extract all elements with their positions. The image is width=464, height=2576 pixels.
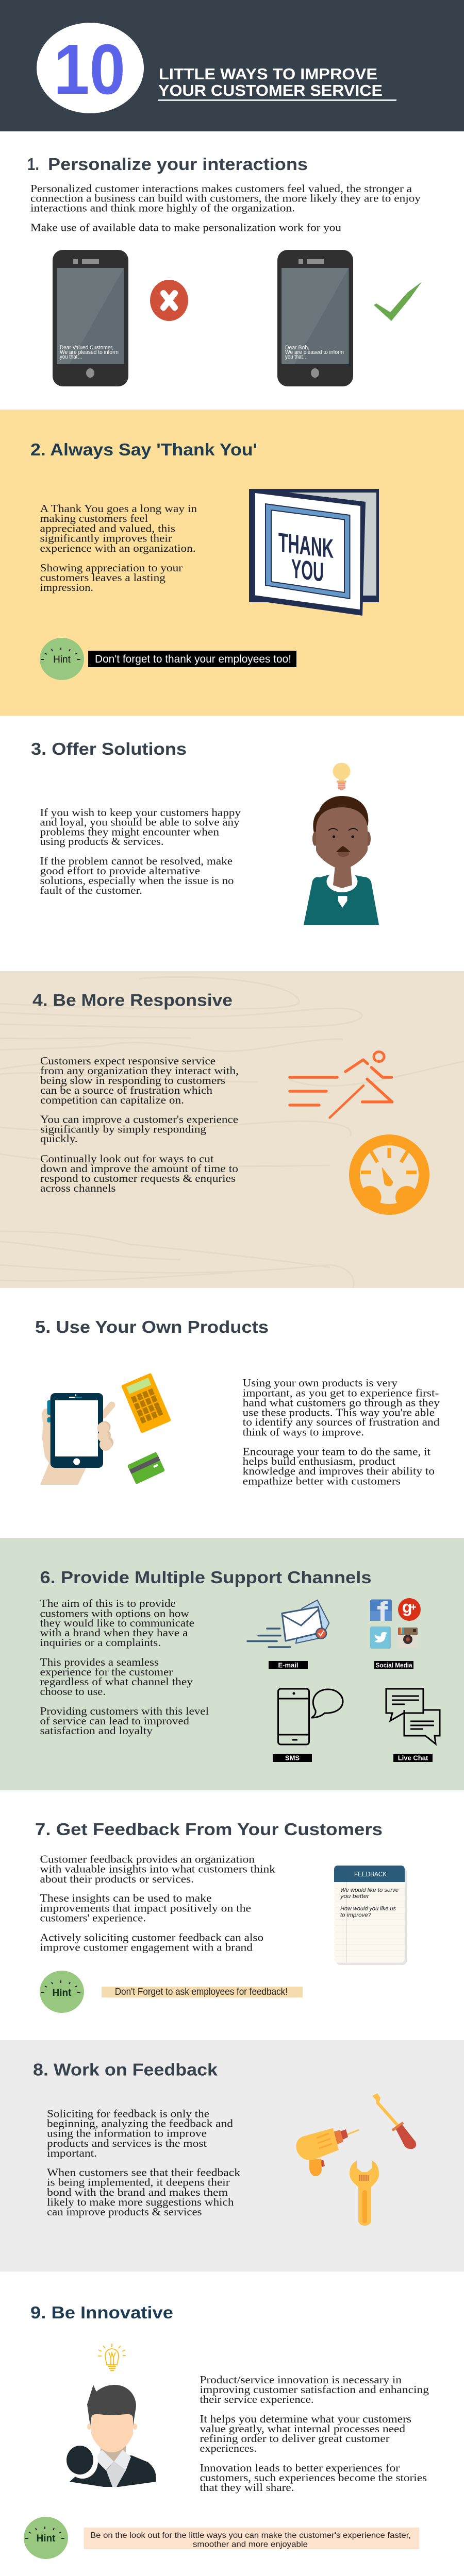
text block 7: customers' experience. — [40, 1912, 146, 1924]
text block 7: about their products or services. — [40, 1873, 194, 1885]
title: YOUR CUSTOMER SERVICE — [158, 81, 383, 99]
text block 1: connection a business can build with customers, the more likely they are to enjoy — [30, 192, 421, 204]
text block 6: they would like to communicate — [40, 1617, 194, 1629]
text block 6: experience for the customer — [40, 1666, 173, 1678]
text block 6: inquiries or a complaints. — [40, 1636, 161, 1649]
text block 8: likely to make more suggestions which — [47, 2196, 234, 2208]
text block 9 — [200, 2374, 429, 2494]
icon: phone with personalised greeting: We are pleased to inform — [285, 349, 344, 355]
label: social media: Social Media — [375, 1661, 412, 1669]
heading 8: 8. Work on Feedback — [33, 2060, 218, 2079]
text block 8: Soliciting for feedback is only the — [47, 2107, 209, 2120]
text block 7: Customer feedback provides an organization — [40, 1853, 255, 1865]
text block 6: with a brand when they have a — [40, 1626, 188, 1639]
text block 2: A Thank You goes a long way in — [40, 502, 197, 515]
icon: sms — [278, 1689, 343, 1744]
text block 2: making customers feel — [40, 512, 148, 524]
text block 8: using the information to improve — [47, 2127, 207, 2140]
icon: thank you card: YOU — [291, 554, 324, 588]
icon: phone with personalised greeting: Dear Bob, — [285, 345, 309, 351]
text block 9: experiences. — [200, 2442, 257, 2454]
text block 9: Product/service innovation is necessary in — [200, 2374, 402, 2386]
icon: light bulb — [333, 762, 351, 790]
heading 5: 5. Use Your Own Products — [35, 1317, 269, 1336]
icon: speedometer — [349, 1134, 429, 1215]
text block 4: can be a source of frustration which — [40, 1084, 213, 1096]
text block 4: down and improve the amount of time to — [40, 1162, 238, 1175]
illustration: businessman — [67, 2385, 156, 2487]
icon: phone with personalised greeting — [277, 250, 353, 386]
text block 5: think of ways to improve. — [243, 1426, 364, 1438]
icon: phone with personalised greeting: you that… — [285, 354, 308, 360]
label: sms: SMS — [285, 1754, 300, 1762]
text block 7: improvements that impact positively on the — [40, 1902, 251, 1914]
text block 1: Make use of available data to make personalization work for you — [30, 222, 342, 234]
icon: live chat — [386, 1689, 440, 1744]
icon: calculator — [121, 1373, 171, 1433]
hint badge — [40, 638, 84, 680]
text block 3: If the problem cannot be resolved, make — [40, 855, 233, 867]
title: LITTLE WAYS TO IMPROVE — [159, 65, 377, 83]
text block 8: beginning, analyzing the feedback and — [47, 2117, 234, 2130]
text block 9: improving customer satisfaction and enhancing — [200, 2383, 429, 2396]
feedback form card — [334, 1866, 407, 1965]
icon: outlined bulb — [98, 2344, 126, 2370]
text block 8: bond with the brand and makes them — [47, 2186, 228, 2198]
icon: phone with generic greeting: We are pleased to inform — [60, 349, 119, 355]
text block 7: These insights can be used to make — [40, 1892, 211, 1904]
panel: 6 provide multiple support channels — [0, 1538, 464, 1790]
text block 3: problems they might encounter when — [40, 825, 220, 838]
text block 8: products and services is the most — [47, 2137, 207, 2149]
text block 5: hand what customers go through as they — [243, 1397, 440, 1409]
text block 8: can improve products & services — [47, 2206, 202, 2218]
heading 1: 1. — [27, 155, 39, 174]
hint badge — [24, 2517, 68, 2559]
text block 7: Actively soliciting customer feedback can also — [40, 1931, 263, 1944]
illustration: customer service man — [304, 796, 379, 925]
text block 9: value greatly, what internal processes need — [200, 2422, 406, 2435]
text block 5: use these products. This way you're able — [243, 1406, 435, 1419]
text block 7: with valuable insights into what customers think — [40, 1862, 276, 1875]
heading 4: 4. Be More Responsive — [32, 990, 233, 1010]
text block 3 — [40, 806, 241, 896]
text block 7: improve customer engagement with a brand — [40, 1941, 253, 1954]
text block 5: knowledge and improves their ability to — [243, 1465, 435, 1477]
text block 6: Providing customers with this level — [40, 1705, 209, 1717]
heading 7: 7. Get Feedback From Your Customers — [35, 1820, 383, 1839]
text block 9: refining order to deliver great customer — [200, 2432, 390, 2445]
text block 4: You can improve a customer's experience — [40, 1113, 238, 1126]
icon: green check mark — [374, 282, 422, 321]
text block 4: quickly. — [40, 1132, 77, 1145]
icon: phone with generic greeting — [53, 250, 128, 386]
panel: 1 personalize your interactions — [27, 155, 422, 386]
hint badge: Hint — [37, 2533, 56, 2544]
text block 4: being slow in responding to customers — [40, 1074, 225, 1087]
icon: social media logos — [370, 1598, 421, 1649]
panel: 5 use your own products — [35, 1317, 440, 1487]
text block 2: experience with an organization. — [40, 542, 196, 554]
text block 3: and loyal, you should be able to solve any — [40, 816, 240, 828]
text block 4: Continually look out for ways to cut — [40, 1153, 214, 1165]
text block 9: It helps you determine what your customers — [200, 2413, 411, 2425]
text block 4: significantly by simply responding — [40, 1123, 207, 1136]
feedback form card: to improve? — [340, 1912, 372, 1919]
heading 6: 6. Provide Multiple Support Channels — [40, 1568, 371, 1587]
text block 4: from any organization they interact with, — [40, 1064, 239, 1077]
hint badge — [40, 1971, 84, 2013]
text block 3: solutions, especially when the issue is no — [40, 874, 234, 887]
hint badge: Hint — [53, 654, 71, 665]
panel: 2 always say thank you — [0, 410, 464, 716]
text block 2: appreciated and valued, this — [40, 522, 175, 535]
feedback form card: FEEDBACK — [354, 1870, 387, 1878]
icon: drill — [296, 2128, 359, 2176]
callout: little ways: Be on the look out for the little ways you can make the customer's experience faster, — [90, 2531, 411, 2540]
text block 2: customers leaves a lasting — [40, 571, 166, 584]
text block 6: choose to use. — [40, 1685, 106, 1698]
text block 6 — [40, 1597, 209, 1737]
hint badge: Hint — [53, 1988, 72, 1998]
text block 3: good effort to provide alternative — [40, 865, 200, 877]
text block 9: their service experience. — [200, 2393, 313, 2405]
text block 2: impression. — [40, 581, 93, 594]
feedback form card: you better — [340, 1893, 370, 1900]
heading 3: 3. Offer Solutions — [31, 739, 187, 758]
label: live chat: Live Chat — [398, 1754, 428, 1762]
text block 4: competition can capitalize on. — [40, 1094, 184, 1106]
text block 4: across channels — [40, 1182, 115, 1194]
text block 2: significantly improves their — [40, 532, 172, 545]
text block 1: Personalized customer interactions makes customers feel valued, the stronger a — [30, 182, 412, 195]
text block 2 — [40, 502, 197, 594]
callout: little ways — [84, 2528, 419, 2549]
icon: google plus — [398, 1598, 421, 1621]
text block 8: is being implemented, it deepens their — [47, 2176, 230, 2189]
label: sms — [273, 1754, 312, 1762]
text block 6: customers with options on how — [40, 1607, 190, 1619]
icon: thank you card: THANK — [278, 528, 334, 564]
icon: google plus: + — [410, 1602, 417, 1613]
text block 5: Encourage your team to do the same, it — [243, 1446, 430, 1458]
text block 5: empathize better with customers — [243, 1475, 401, 1487]
heading 2: 2. Always Say 'Thank You' — [30, 440, 257, 459]
text block 4: respond to customer requests & enquries — [40, 1172, 236, 1184]
text block 4 — [40, 1055, 239, 1194]
text block 6: This provides a seamless — [40, 1656, 159, 1668]
icon: red cross — [150, 280, 188, 321]
text block 3: fault of the customer. — [40, 884, 142, 896]
label: e-mail — [269, 1661, 308, 1669]
header banner — [0, 0, 464, 131]
label: e-mail: E-mail — [278, 1661, 299, 1669]
icon: facebook — [370, 1599, 392, 1621]
callout: thank employees — [88, 651, 296, 667]
icon: wrench — [350, 2161, 379, 2226]
text block 6: satisfaction and loyalty — [40, 1724, 153, 1737]
text block 3: If you wish to keep your customers happy — [40, 806, 241, 819]
heading 9: 9. Be Innovative — [30, 2303, 173, 2322]
text block 5: important, as you get to experience first- — [243, 1387, 439, 1399]
panel: 7 get feedback — [35, 1820, 407, 2013]
icon: instagram — [398, 1628, 418, 1648]
text block 3: using products & services. — [40, 835, 164, 848]
icon: runner — [290, 1052, 392, 1117]
text block 5: to identify any sources of frustration and — [243, 1416, 440, 1428]
icon: thank you card — [249, 489, 379, 616]
callout: little ways: smoother and more enjoyable — [193, 2540, 308, 2549]
text block 8: important. — [47, 2147, 97, 2159]
icon: phone with generic greeting: Dear Valued Customer, — [60, 345, 113, 351]
icon: credit card — [127, 1452, 165, 1484]
heading 1: Personalize your interactions — [48, 155, 308, 174]
text block 8 — [47, 2107, 241, 2218]
badge: number 10: 10 — [54, 30, 125, 109]
panel: 8 work on feedback — [0, 2040, 464, 2272]
panel: 3 offer solutions — [31, 739, 379, 925]
text block 6: The aim of this is to provide — [40, 1597, 176, 1609]
feedback form card: We would like to serve — [340, 1887, 399, 1893]
text block 1 — [30, 182, 421, 234]
icon: email — [247, 1600, 329, 1647]
icon: twitter — [370, 1626, 391, 1649]
icon: phone with generic greeting: you that… — [60, 354, 82, 360]
text block 6: of service can lead to improved — [40, 1715, 190, 1727]
text block 4: Customers expect responsive service — [40, 1055, 216, 1067]
text block 6: regardless of what channel they — [40, 1675, 193, 1688]
callout: ask employees: Don't Forget to ask employees for feedback! — [115, 1987, 288, 1997]
text block 1: interactions and think more highly of the organization. — [30, 202, 295, 214]
feedback form card: How would you like us — [340, 1906, 396, 1912]
text block 5: helps build enthusiasm, product — [243, 1455, 395, 1467]
text block 8: When customers see that their feedback — [47, 2166, 241, 2179]
panel: 9 be innovative — [24, 2303, 429, 2559]
icon: google plus: g — [402, 1598, 412, 1616]
text block 9: customers, such experiences become the stories — [200, 2471, 427, 2484]
badge: number 10 — [37, 23, 144, 113]
text block 7 — [40, 1853, 276, 1954]
icon: screwdriver — [372, 2093, 416, 2149]
text block 9: that they will share. — [200, 2481, 294, 2494]
text block 9: Innovation leads to better experiences for — [200, 2462, 400, 2474]
illustration: hand holding phone — [40, 1393, 113, 1485]
text block 5: Using your own products is very — [243, 1377, 398, 1389]
text block 5 — [243, 1377, 440, 1487]
callout: thank employees: Don't forget to thank your employees too! — [95, 653, 291, 665]
text block 2: Showing appreciation to your — [40, 562, 183, 574]
panel: 4 be more responsive — [0, 971, 464, 1288]
title — [158, 65, 396, 101]
